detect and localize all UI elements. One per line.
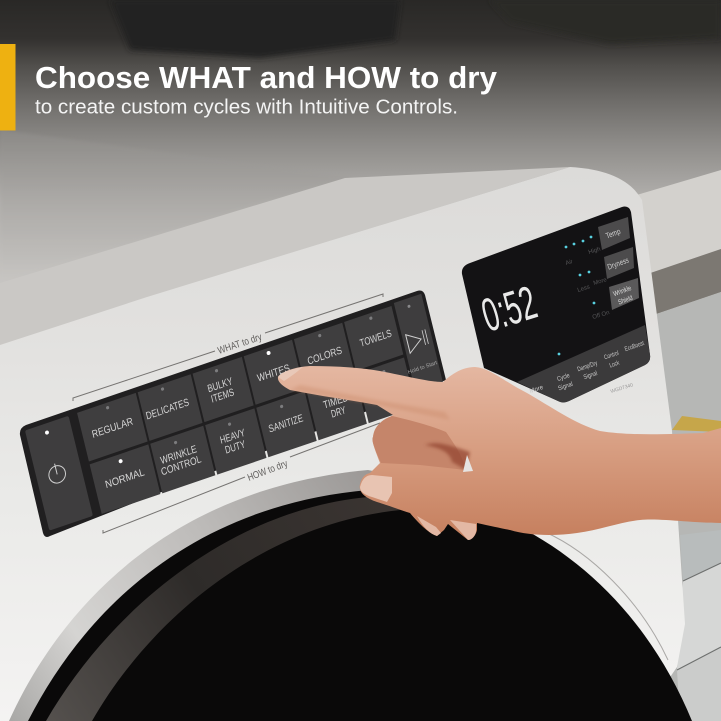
status labels: Off On bbox=[592, 310, 610, 321]
subtitle: to create custom cycles with Intuitive Controls. bbox=[35, 96, 458, 118]
button labels bbox=[89, 322, 407, 497]
button grid bbox=[77, 306, 416, 514]
button labels: DRY bbox=[330, 404, 347, 421]
wrinkle shield button: Wrinkle bbox=[612, 285, 633, 298]
panel body bbox=[20, 290, 446, 537]
lower option labels bbox=[529, 340, 645, 395]
lower option strip bbox=[517, 325, 650, 402]
button labels: REGULAR bbox=[91, 415, 135, 441]
dryer top surface bbox=[0, 167, 570, 345]
button labels: HEAVY bbox=[219, 427, 246, 447]
button labels: DUTY bbox=[224, 438, 247, 457]
bracket: how to dry bbox=[103, 423, 380, 533]
button labels: WHITES bbox=[256, 362, 291, 385]
cabinet bbox=[630, 292, 721, 721]
door inner band bbox=[46, 497, 400, 721]
curled finger shadow bbox=[372, 416, 466, 470]
gap between fingers bbox=[463, 455, 473, 472]
button indicator lights bbox=[105, 316, 386, 464]
bracket: what to dry: WHAT to dry bbox=[216, 332, 264, 357]
status lights bbox=[558, 236, 595, 355]
index finger shading bbox=[290, 385, 450, 420]
dryness button: Dryness bbox=[606, 256, 630, 272]
curled fingertips bbox=[417, 516, 476, 540]
status labels bbox=[565, 247, 610, 321]
display body bbox=[462, 207, 650, 402]
index fingernail bbox=[278, 367, 303, 381]
button labels: NORMAL bbox=[104, 466, 146, 491]
hand pressing button bbox=[278, 366, 721, 540]
time readout: 0:52 bbox=[475, 275, 543, 342]
gold handle bbox=[672, 416, 721, 432]
door rim bbox=[9, 470, 470, 721]
lower option labels: Cycle bbox=[556, 372, 571, 383]
folded sheet on dryer top bbox=[0, 130, 350, 283]
button labels: DELICATES bbox=[145, 396, 190, 423]
button labels: WRINKLE bbox=[159, 443, 198, 467]
status labels: Air bbox=[565, 259, 574, 267]
dark trim under counter bbox=[630, 249, 721, 323]
button labels: COLORS bbox=[306, 344, 343, 368]
accent bar bbox=[0, 44, 16, 130]
display panel bbox=[462, 207, 650, 402]
power button bbox=[25, 416, 93, 531]
button labels: SANITIZE bbox=[267, 412, 304, 436]
title: Choose WHAT and HOW to dry bbox=[35, 60, 498, 95]
crease shadow bbox=[425, 443, 470, 470]
hand and index finger bbox=[278, 366, 721, 540]
button labels: ITEMS bbox=[210, 386, 235, 406]
hold to start label: Hold to Start bbox=[407, 360, 439, 376]
bracket: how to dry: HOW to dry bbox=[246, 458, 289, 484]
button labels: TIMED bbox=[322, 392, 350, 412]
dryness button bbox=[604, 247, 634, 279]
wrinkle shield button bbox=[609, 278, 639, 310]
model number: WGD7340 bbox=[610, 382, 634, 395]
lower option labels: Lock bbox=[609, 359, 621, 370]
cycle control panel bbox=[20, 290, 446, 537]
lower option labels: More bbox=[529, 384, 545, 395]
thumb nail bbox=[360, 475, 392, 502]
door seal bbox=[28, 490, 692, 721]
start pause button bbox=[394, 294, 446, 406]
status labels: More bbox=[593, 277, 608, 287]
bracket: what to dry bbox=[73, 294, 383, 401]
dryer front panel bbox=[0, 167, 685, 721]
temp button: Temp bbox=[605, 227, 622, 240]
counter front edge bbox=[630, 170, 721, 280]
lower option labels: EcoBoost bbox=[624, 340, 645, 353]
status labels: High bbox=[588, 247, 601, 256]
lower option labels: Signal bbox=[583, 370, 599, 381]
dryer door bbox=[9, 470, 692, 721]
temp button bbox=[598, 217, 630, 250]
wrinkle shield button: Shield bbox=[617, 295, 634, 306]
lower option labels: Damp/Dry bbox=[576, 360, 599, 373]
lower option labels: Control bbox=[603, 350, 620, 361]
lower option labels: Signal bbox=[557, 381, 574, 392]
button labels: TOWELS bbox=[359, 327, 393, 350]
door right edge highlight bbox=[545, 532, 668, 660]
button labels: BULKY bbox=[206, 375, 234, 395]
status labels: Less bbox=[577, 284, 591, 294]
button labels: CONTROL bbox=[160, 453, 203, 478]
